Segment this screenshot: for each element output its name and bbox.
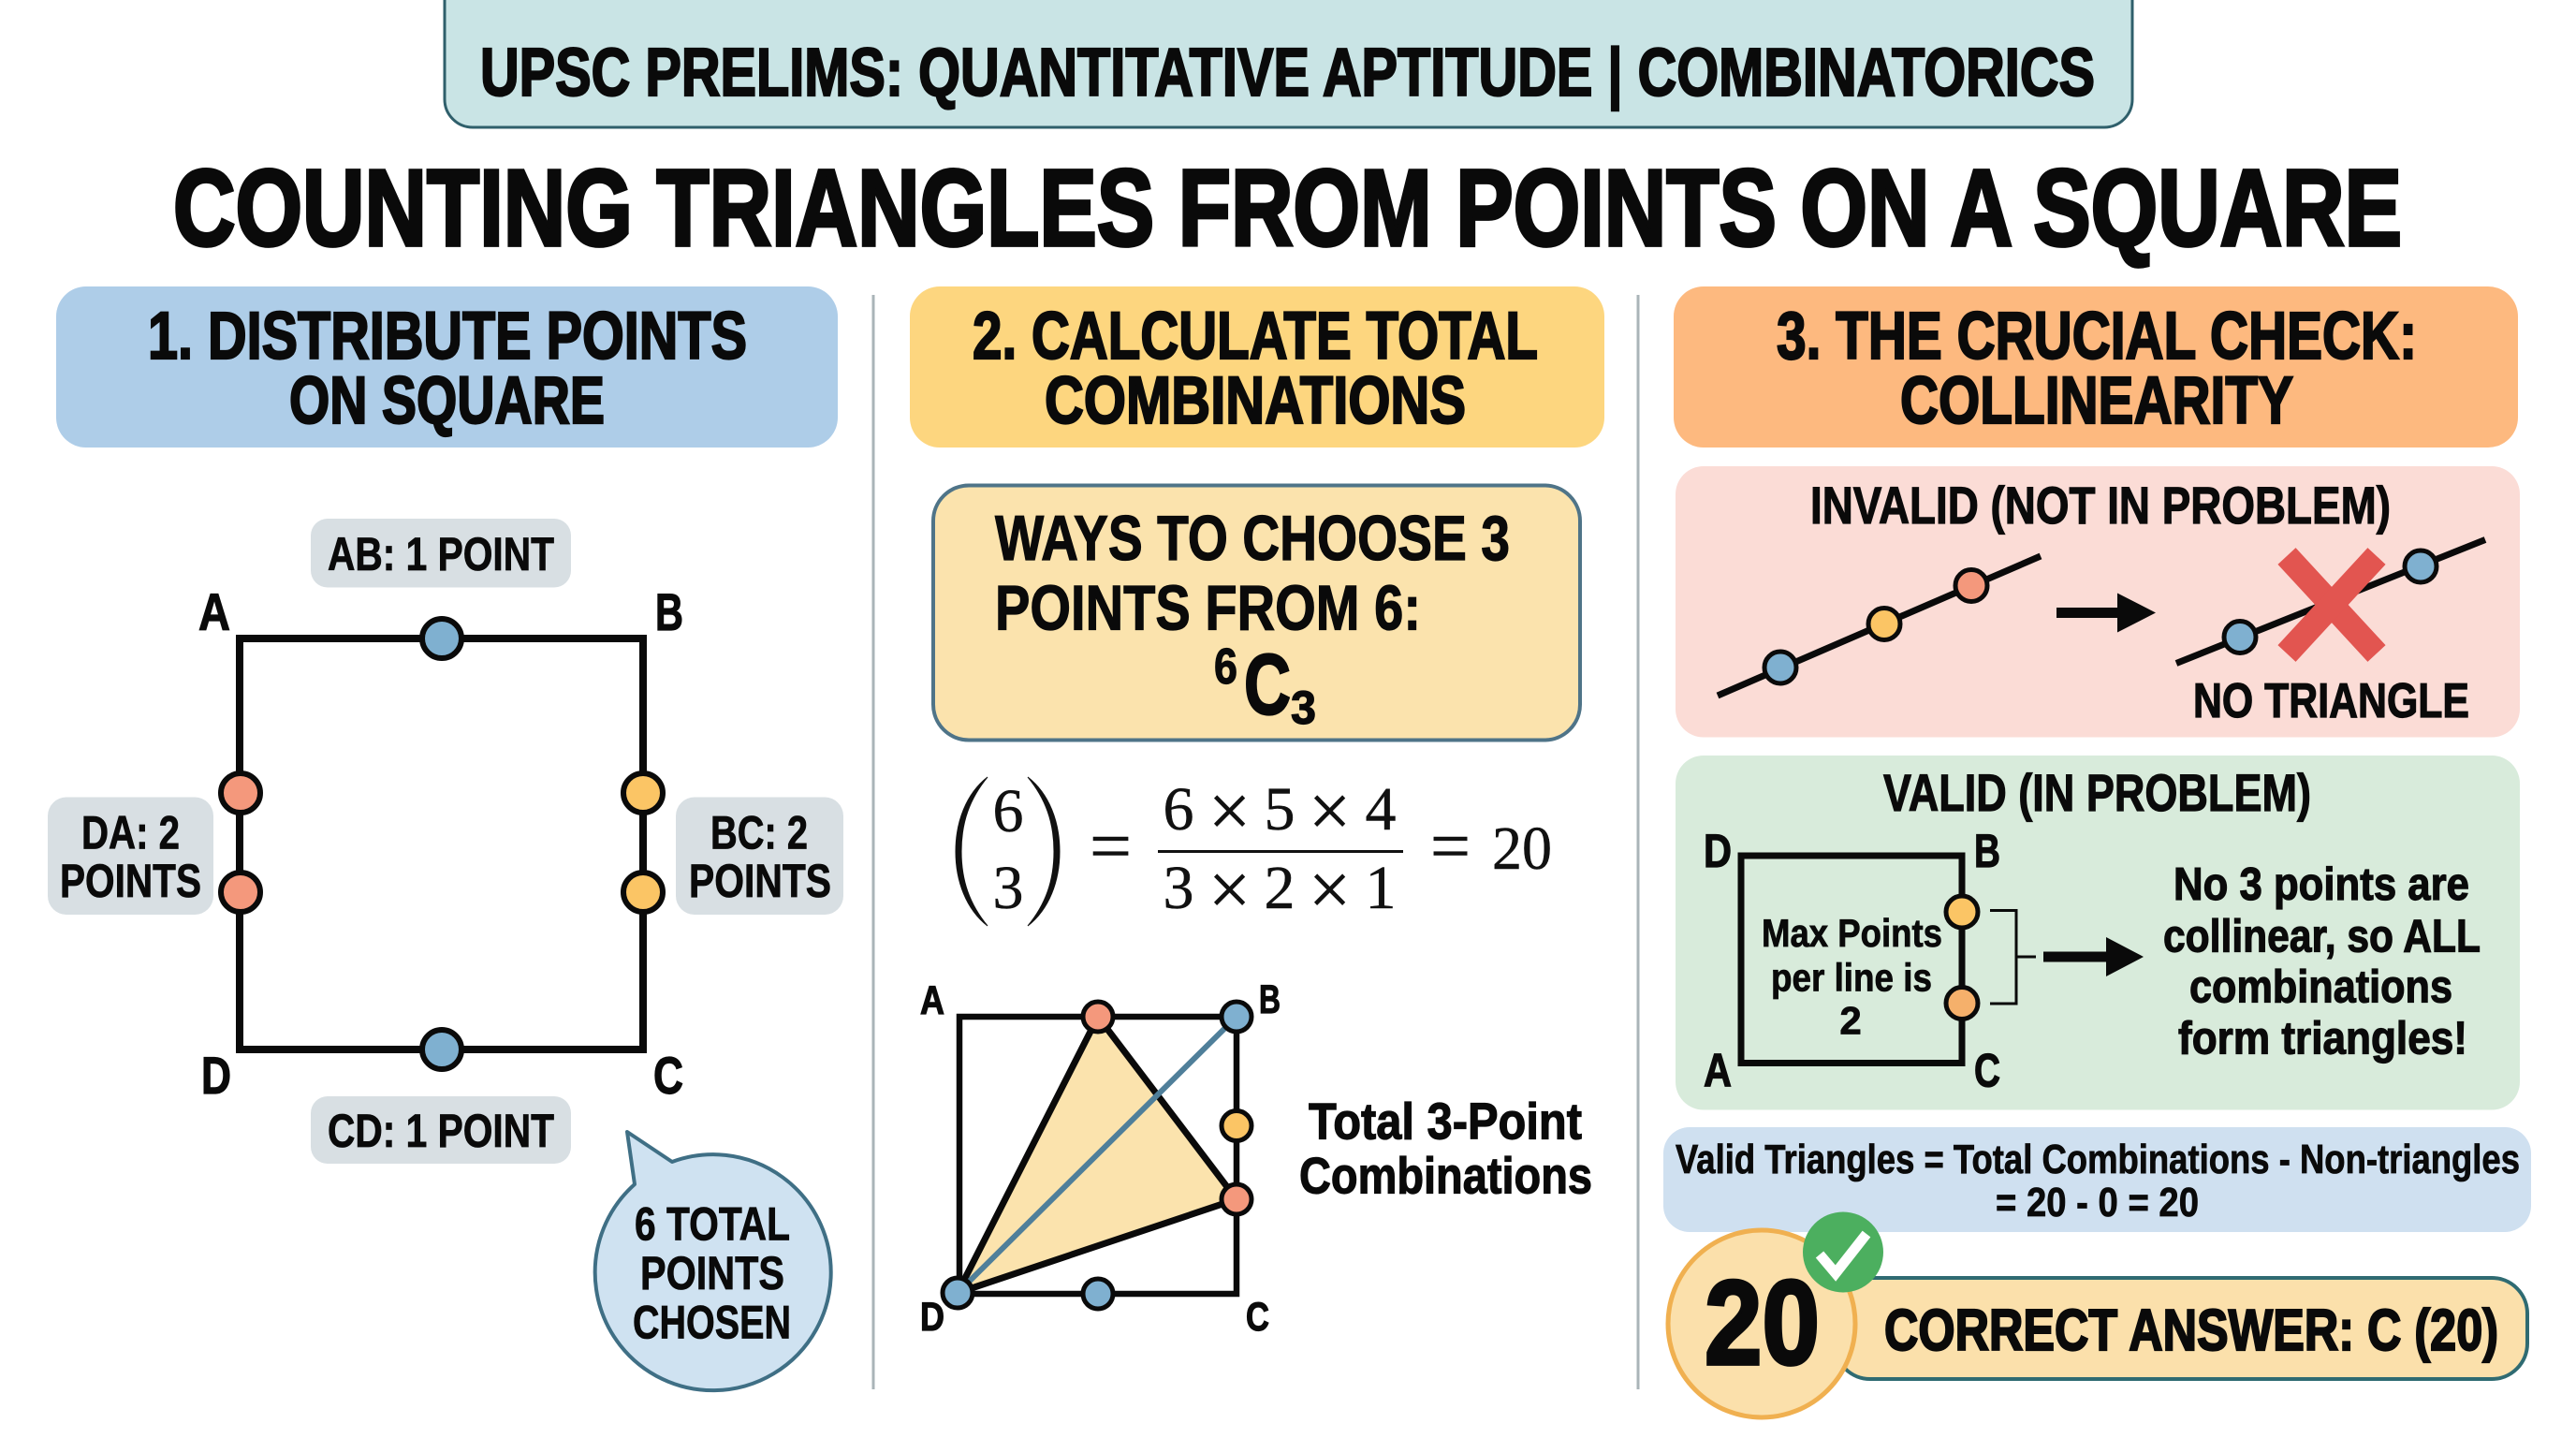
formula box: ways to choose 3 points from 6: 3 — [1291, 682, 1316, 734]
heading: step 2: COMBINATIONS — [1045, 364, 1466, 438]
caption: total 3-point combinations: Combinations — [1299, 1146, 1592, 1204]
top banner: exam and topic: UPSC PRELIMS: QUANTITATIVE APTITUDE | COMBINATORICS — [480, 36, 2095, 110]
diagram: sample triangle inside square — [920, 977, 1281, 1340]
caption: total 3-point combinations — [1299, 1092, 1592, 1204]
equation: 6 choose 3 equals 20: = — [1430, 805, 1471, 887]
heading: step 1 — [56, 286, 838, 448]
square with max two points per line: per line is — [1771, 955, 1932, 1000]
equation: 6 choose 3 equals 20: 1 — [1365, 854, 1397, 922]
formula strip: valid triangles — [1663, 1127, 2531, 1232]
equation: 6 choose 3 equals 20: × — [1309, 770, 1351, 853]
arrow — [2056, 594, 2156, 633]
square diagram with six points: B — [655, 582, 683, 641]
label: DA 2 points: DA: 2 — [81, 807, 180, 859]
explanation text: combinations — [2189, 962, 2452, 1013]
formula strip: valid triangles: = 20 - 0 = 20 — [1996, 1180, 2199, 1225]
answer badge: 20 — [1668, 1230, 1855, 1417]
label: AB 1 point: AB: 1 POINT — [328, 528, 554, 580]
equation: 6 choose 3 equals 20: 4 — [1365, 775, 1397, 844]
collinear points on a line — [1718, 556, 2041, 696]
diagram: sample triangle inside square: D — [920, 1295, 944, 1340]
label: BC 2 points: BC: 2 — [710, 807, 808, 859]
formula box: ways to choose 3 points from 6: C — [1244, 637, 1291, 732]
equation: 6 choose 3 equals 20: = — [1090, 805, 1132, 887]
callout: 6 total points chosen: CHOSEN — [633, 1296, 791, 1348]
heading: step 3: 3. THE CRUCIAL CHECK: — [1777, 300, 2417, 374]
sub-panel: invalid case: INVALID (NOT IN PROBLEM) — [1810, 476, 2391, 535]
panel: 1. distribute points on square — [48, 286, 843, 1390]
equation: 6 choose 3 equals 20: 3 — [1163, 854, 1194, 922]
explanation text: form triangles! — [2178, 1013, 2467, 1064]
equation: 6 choose 3 equals 20: 20 — [1492, 814, 1552, 883]
equation: 6 choose 3 equals 20: 2 — [1264, 854, 1295, 922]
equation: 6 choose 3 equals 20: × — [1309, 849, 1351, 932]
equation: 6 choose 3 equals 20: 6 — [992, 777, 1024, 845]
caption: total 3-point combinations: Total 3-Point — [1309, 1092, 1582, 1150]
diagram: sample triangle inside square: C — [1246, 1295, 1269, 1340]
label: DA 2 points — [48, 798, 213, 915]
formula box: ways to choose 3 points from 6: 6 — [1214, 638, 1237, 695]
heading: step 1: ON SQUARE — [289, 364, 605, 438]
square diagram with six points: C — [653, 1046, 683, 1105]
label: CD 1 point — [311, 1096, 571, 1164]
square diagram with six points: A — [198, 582, 230, 641]
bracket — [1990, 910, 2036, 1004]
arrow — [2043, 937, 2144, 976]
label: AB 1 point — [311, 519, 571, 588]
square diagram with six points — [198, 582, 683, 1105]
callout: 6 total points chosen: POINTS — [640, 1247, 784, 1299]
label: BC 2 points: POINTS — [689, 855, 831, 907]
sub-panel: valid case: VALID (IN PROBLEM) — [1883, 763, 2311, 822]
heading: step 2: 2. CALCULATE TOTAL — [973, 300, 1538, 374]
heading: step 1: 1. DISTRIBUTE POINTS — [148, 300, 747, 374]
diagram: sample triangle inside square: B — [1259, 977, 1281, 1022]
formula box: ways to choose 3 points from 6 — [933, 485, 1580, 740]
sub-panel: invalid case — [1676, 466, 2520, 738]
square with max two points per line: Max Points — [1762, 911, 1942, 955]
explanation text: No 3 points are — [2174, 859, 2469, 910]
crossed-out line: no triangle — [2176, 539, 2485, 728]
square with max two points per line: A — [1704, 1045, 1732, 1097]
equation: 6 choose 3 equals 20: × — [1208, 849, 1251, 932]
label: DA 2 points: POINTS — [60, 855, 201, 907]
square with max two points per line — [1704, 825, 2000, 1097]
heading: step 3: COLLINEARITY — [1900, 364, 2293, 438]
equation: 6 choose 3 equals 20: 6 — [1163, 775, 1194, 844]
callout: 6 total points chosen: 6 TOTAL — [635, 1198, 790, 1251]
panel: 2. calculate total combinations — [910, 286, 1604, 1340]
answer badge: 20: 20 — [1705, 1256, 1820, 1390]
explanation text: collinear, so ALL — [2163, 912, 2481, 962]
panel: 3. the crucial check collinearity — [1663, 286, 2531, 1417]
label: BC 2 points — [676, 798, 843, 915]
equation: 6 choose 3 equals 20 — [956, 770, 1552, 932]
formula box: ways to choose 3 points from 6: POINTS FROM 6: — [995, 573, 1421, 644]
square diagram with six points: D — [201, 1046, 231, 1105]
square with max two points per line: D — [1704, 825, 1732, 877]
heading: step 2 — [910, 286, 1604, 448]
explanation text — [2163, 859, 2481, 1064]
equation: 6 choose 3 equals 20: × — [1208, 770, 1251, 853]
square with max two points per line: C — [1974, 1045, 2000, 1097]
equation: 6 choose 3 equals 20: 5 — [1264, 775, 1295, 844]
answer bar: correct answer — [1835, 1278, 2527, 1379]
callout: 6 total points chosen — [595, 1132, 831, 1390]
label: CD 1 point: CD: 1 POINT — [328, 1105, 554, 1157]
diagram: sample triangle inside square: A — [920, 978, 944, 1023]
formula box: ways to choose 3 points from 6: WAYS TO CHOOSE 3 — [995, 503, 1510, 574]
top banner: exam and topic — [445, 0, 2132, 127]
square with max two points per line: 2 — [1839, 998, 1862, 1043]
crossed-out line: no triangle: NO TRIANGLE — [2193, 674, 2469, 728]
equation: 6 choose 3 equals 20: 3 — [992, 854, 1024, 922]
square with max two points per line: B — [1974, 825, 2000, 877]
sub-panel: valid case — [1676, 756, 2520, 1110]
heading: step 3 — [1674, 286, 2518, 448]
icon: green check mark — [1803, 1211, 1883, 1292]
